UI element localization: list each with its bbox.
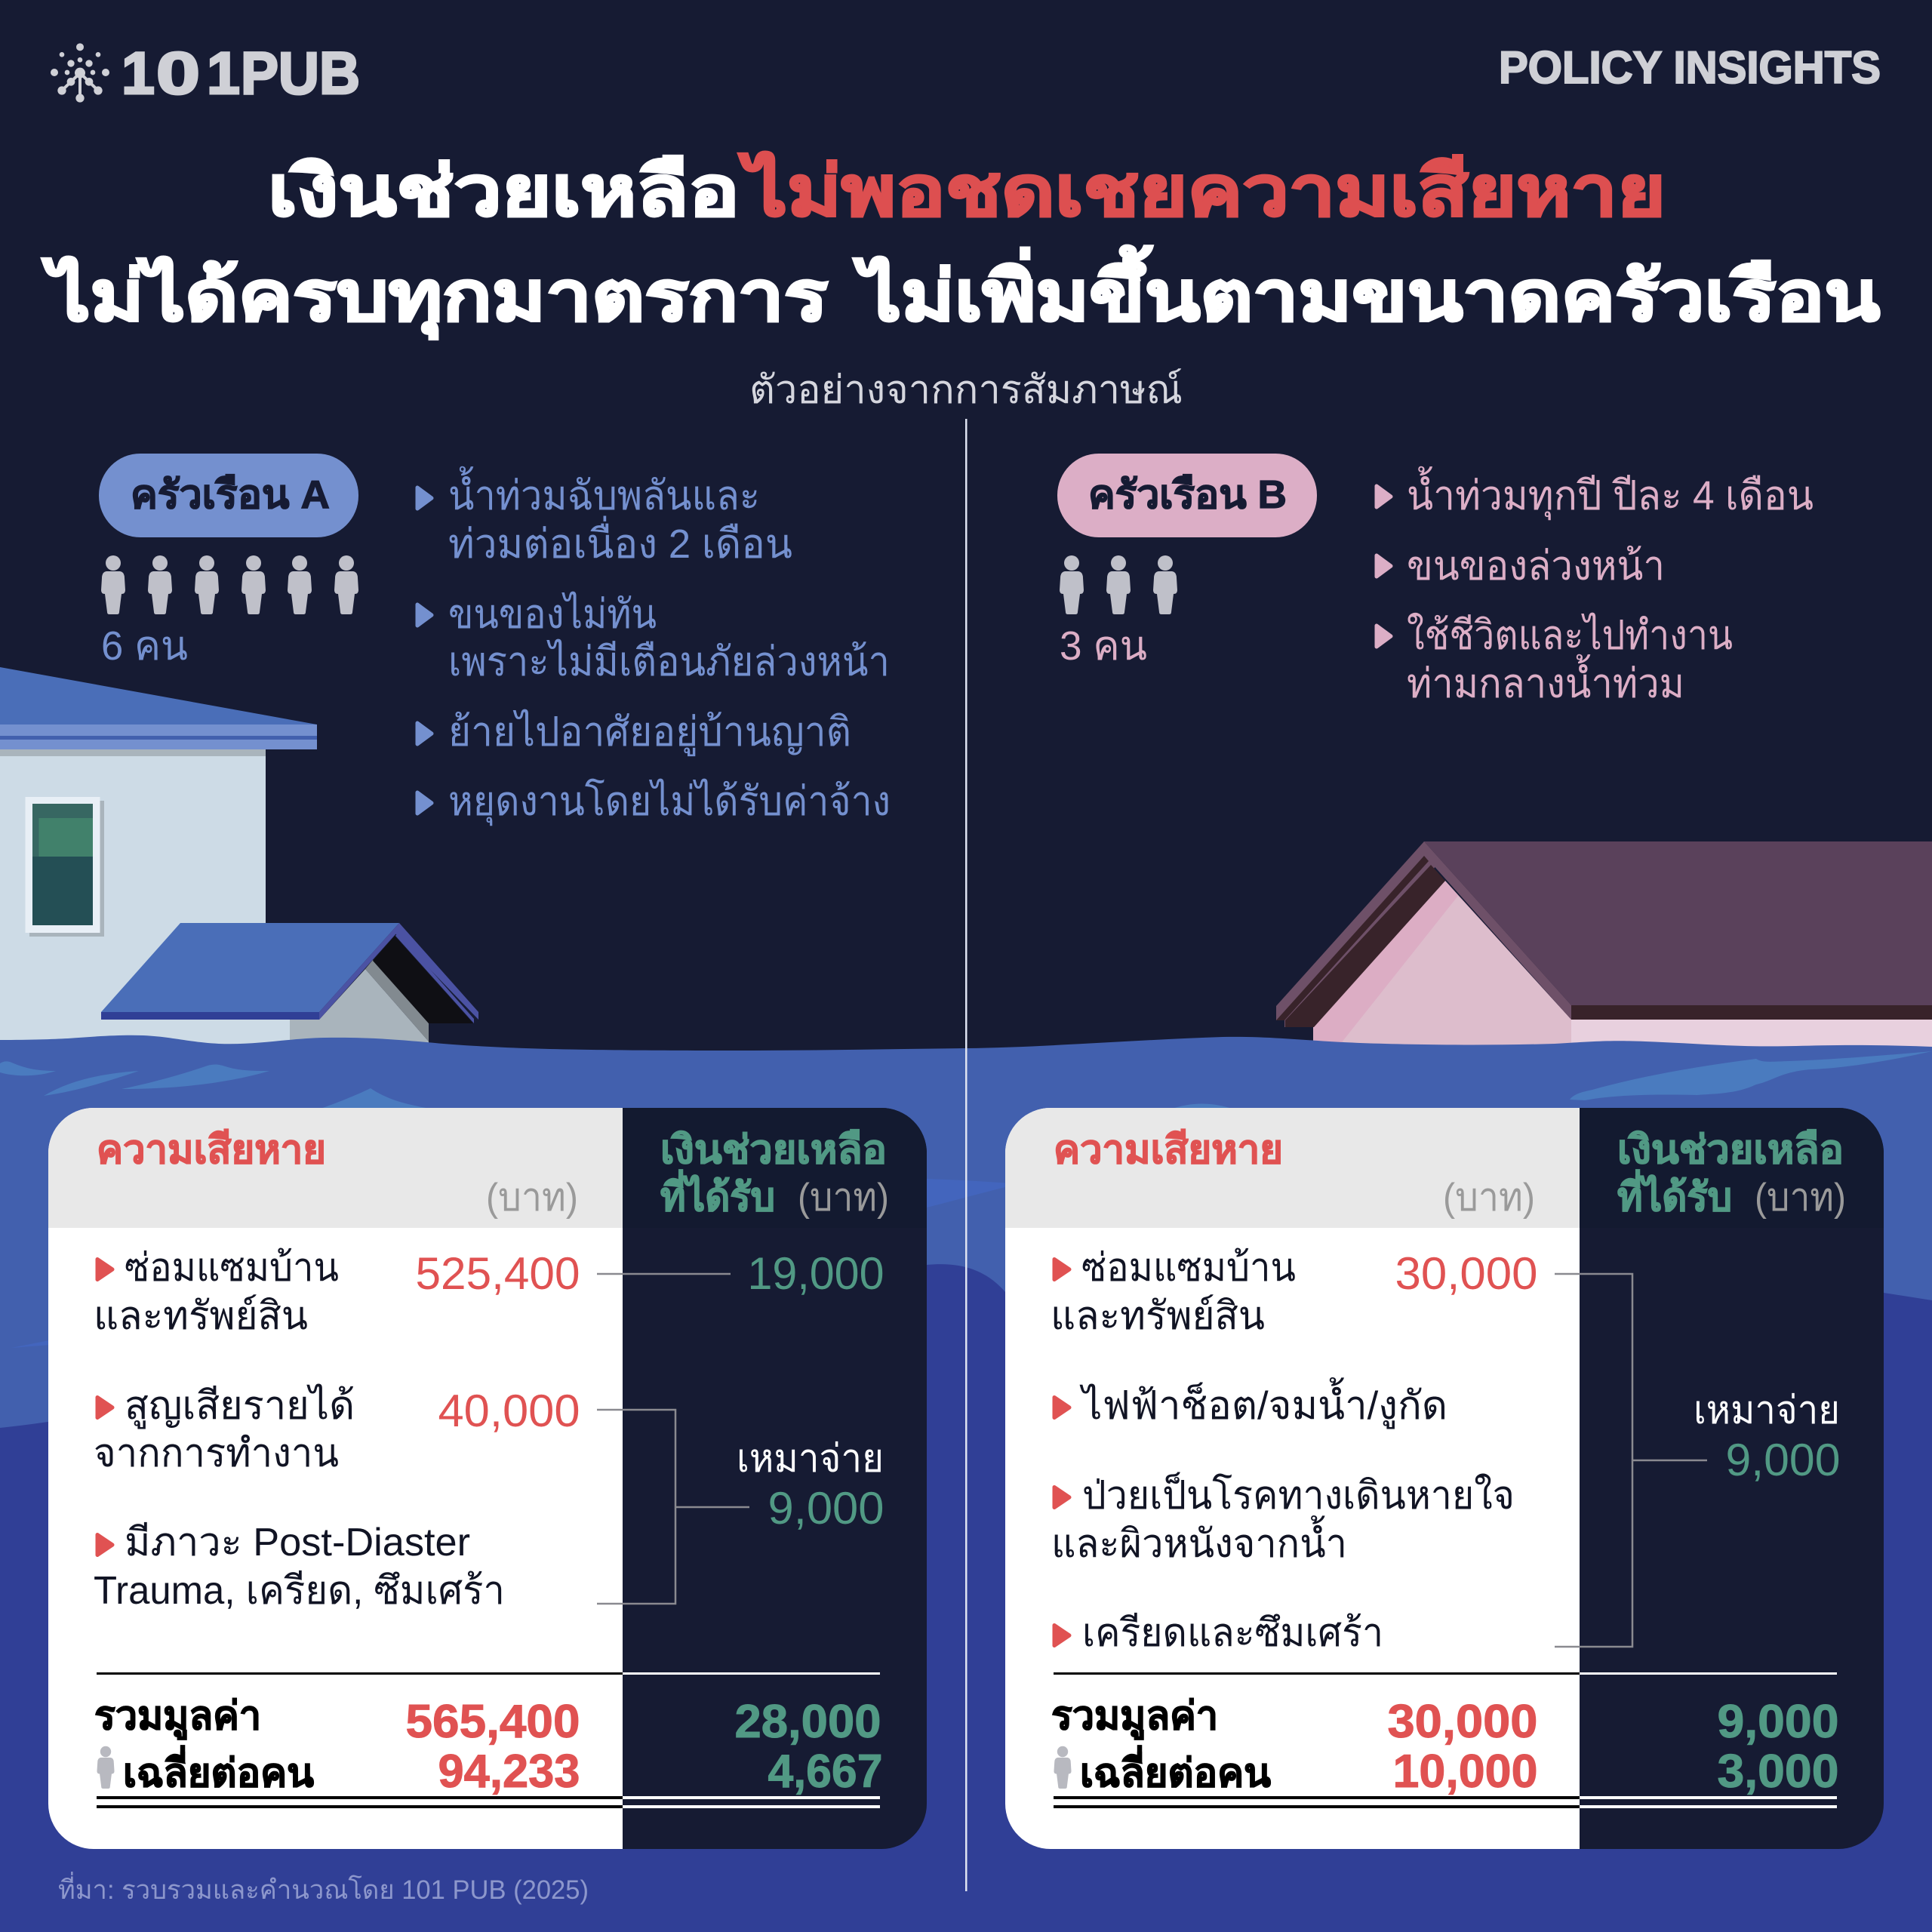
header: damage: ความเสียหาย	[1054, 1128, 1283, 1172]
row: per person: 10,000	[1393, 1746, 1538, 1798]
label: 3 people: 3 คน	[1060, 623, 1147, 669]
row: house repair: และทรัพย์สิน	[1051, 1294, 1265, 1338]
panel: table household A	[48, 1108, 927, 1849]
logo wordmark: PUB	[241, 39, 360, 106]
title line 1 red: ไม่พอชดเชยความเสียหาย	[737, 152, 1666, 230]
row: respiratory and skin illness: ป่วยเป็นโรคทางเดินหายใจ	[1082, 1472, 1515, 1518]
pill: household A	[99, 454, 358, 537]
row: income loss	[94, 1383, 580, 1475]
illustration: house A	[0, 667, 478, 1058]
header: compensation: (บาท)	[798, 1176, 889, 1220]
card background	[48, 1108, 927, 1849]
logo wordmark	[122, 39, 360, 106]
list: household B situation: ขนของล่วงหน้า	[1407, 543, 1665, 589]
row: per person: 4,667	[768, 1746, 883, 1798]
title line 1 white: เงินช่วยเหลือ	[268, 153, 740, 230]
lump-sum amount	[1694, 1389, 1840, 1485]
connector lines	[597, 1274, 749, 1604]
row: total: 9,000	[1718, 1696, 1838, 1748]
title	[41, 152, 1880, 340]
list: household A situation: ขนของไม่ทัน	[448, 591, 657, 637]
card background	[1005, 1108, 1884, 1849]
logo wordmark: 1	[207, 39, 240, 106]
list: household A situation: น้ำท่วมฉับพลันและ	[448, 466, 760, 518]
row: per person	[1054, 1746, 1838, 1798]
pill: household B	[1057, 454, 1317, 537]
double rule	[97, 1796, 880, 1808]
subtitle: ตัวอย่างจากการสัมภาษณ์	[749, 368, 1183, 412]
row: respiratory and skin illness	[1051, 1472, 1515, 1566]
row: respiratory and skin illness: และผิวหนังจากน้ำ	[1051, 1515, 1347, 1566]
row: total: 30,000	[1387, 1696, 1538, 1748]
header: compensation: ที่ได้รับ	[660, 1170, 775, 1220]
header: compensation: ที่ได้รับ	[1617, 1170, 1732, 1220]
centre divider	[965, 419, 968, 1891]
row: total: รวมมูลค่า	[94, 1694, 261, 1740]
series label: POLICY INSIGHTS	[1499, 42, 1881, 93]
header: damage: ความเสียหาย	[97, 1128, 326, 1172]
row: electric shock, drowning, snakebite: ไฟฟ้าช็อต/จมน้ำ/งูกัด	[1079, 1377, 1447, 1429]
lump-sum amount: เหมาจ่าย	[737, 1437, 884, 1481]
illustration: house B	[1276, 841, 1932, 1065]
row: per person: 3,000	[1718, 1746, 1838, 1798]
row: total	[94, 1694, 881, 1748]
row: total	[1051, 1694, 1838, 1748]
row: house repair	[1051, 1246, 1538, 1338]
row: per person: 94,233	[438, 1746, 580, 1798]
header: compensation	[660, 1128, 889, 1220]
row: total: รวมมูลค่า	[1051, 1694, 1218, 1740]
row: income loss: สูญเสียรายได้	[125, 1383, 355, 1429]
row: income loss: จากการทำงาน	[94, 1432, 339, 1475]
logo wordmark: 1	[122, 39, 155, 106]
connector lines	[1555, 1274, 1707, 1647]
row: house repair: และทรัพย์สิน	[94, 1294, 308, 1338]
row: house repair: ซ่อมแซมบ้าน	[125, 1246, 339, 1290]
panel: household B intro	[1057, 454, 1814, 706]
row: house repair: 525,400	[415, 1248, 580, 1299]
row: total: 28,000	[735, 1696, 881, 1748]
list: household A situation: ท่วมต่อเนื่อง 2 เดือน	[448, 515, 792, 567]
header: compensation: เงินช่วยเหลือ	[660, 1128, 887, 1172]
pill: household A: ครัวเรือน A	[131, 473, 330, 517]
total rule	[1054, 1672, 1837, 1675]
header: damage	[1054, 1128, 1535, 1220]
logo wordmark: 0	[156, 39, 200, 106]
title line 2 left: ไม่ได้ครบทุกมาตรการ	[41, 257, 828, 340]
list: household A situation	[417, 466, 891, 826]
list: household B situation	[1377, 466, 1814, 706]
lump-sum amount: 9,000	[768, 1483, 884, 1534]
list: household A situation: เพราะไม่มีเตือนภัยล่วงหน้า	[448, 638, 890, 685]
double rule	[1054, 1796, 1837, 1808]
list: household B situation: ท่ามกลางน้ำท่วม	[1407, 654, 1684, 706]
lump-sum amount: 9,000	[1725, 1435, 1840, 1485]
panel: household A intro	[99, 454, 891, 826]
title line 2 right: ไม่เพิ่มขึ้นตามขนาดครัวเรือน	[852, 245, 1880, 335]
header: compensation: เงินช่วยเหลือ	[1617, 1128, 1844, 1172]
lump-sum amount: เหมาจ่าย	[1694, 1389, 1840, 1432]
water: mid-blue flood	[0, 1035, 1932, 1932]
icons: six people	[101, 555, 358, 614]
list: household B situation: น้ำท่วมทุกปี ปีละ 4 เดือน	[1407, 466, 1814, 521]
row: stress and depression: เครียดและซึมเศร้า	[1082, 1611, 1383, 1655]
panel: table household B	[1005, 1108, 1884, 1849]
header: compensation: (บาท)	[1755, 1176, 1846, 1220]
header: damage: (บาท)	[1443, 1176, 1535, 1220]
row: house repair: ซ่อมแซมบ้าน	[1081, 1246, 1296, 1290]
row: house repair: 19,000	[747, 1248, 884, 1299]
water: wave highlights	[0, 1051, 1932, 1348]
row: per person	[97, 1746, 883, 1798]
row: income loss: 40,000	[438, 1386, 580, 1436]
icon: logo mark	[51, 43, 109, 103]
logo: 101PUB	[51, 39, 360, 106]
header: damage: (บาท)	[486, 1176, 578, 1220]
row: total: 565,400	[406, 1696, 580, 1748]
header: damage	[97, 1128, 578, 1220]
lump-sum amount	[737, 1437, 884, 1534]
pill: household B: ครัวเรือน B	[1088, 473, 1287, 517]
label: 6 people: 6 คน	[101, 623, 188, 669]
icons: three people	[1060, 555, 1177, 614]
list: household A situation: ย้ายไปอาศัยอยู่บ้านญาติ	[448, 709, 851, 756]
header: compensation	[1617, 1128, 1846, 1220]
list: household A situation: หยุดงานโดยไม่ได้รับค่าจ้าง	[448, 778, 891, 826]
total rule	[97, 1672, 880, 1675]
row: house repair: 30,000	[1395, 1248, 1538, 1299]
source note: ที่มา: รวบรวมและคำนวณโดย 101 PUB (2025)	[58, 1872, 589, 1905]
row: per person: เฉลี่ยต่อคน	[1080, 1746, 1271, 1795]
row: trauma: มีภาวะ Post-Diaster	[125, 1521, 470, 1564]
row: trauma: Trauma, เครียด, ซึมเศร้า	[94, 1569, 505, 1613]
row: trauma	[94, 1521, 505, 1613]
row: per person: เฉลี่ยต่อคน	[123, 1746, 314, 1795]
list: household B situation: ใช้ชีวิตและไปทำงาน	[1407, 612, 1733, 658]
row: house repair	[94, 1246, 884, 1338]
water: deep dark-blue layer	[0, 1264, 1932, 1932]
